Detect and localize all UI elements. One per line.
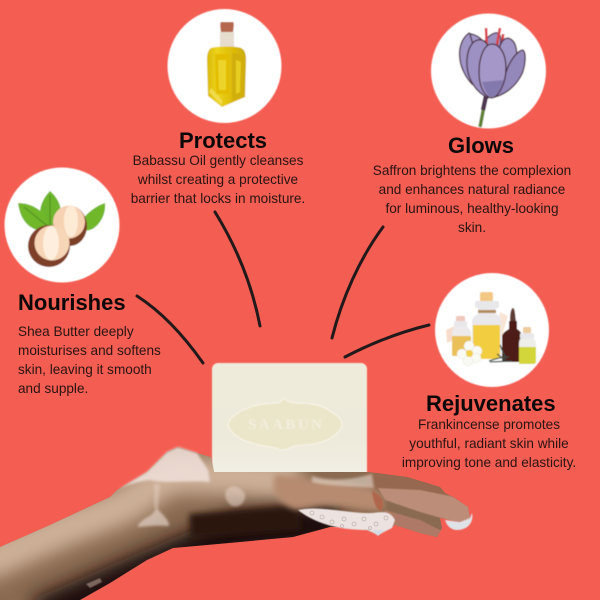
heading: protects: Protects: [179, 128, 267, 153]
heading: glows: Glows: [448, 133, 514, 158]
text: glows: skin.: [458, 220, 486, 235]
text: nourishes: Shea Butter deeply: [18, 324, 134, 338]
lower finger: [384, 510, 440, 537]
text: protects: barrier that locks in moisture.: [131, 190, 305, 206]
foam: wrist: [117, 447, 210, 490]
heading: rejuvenates: Rejuvenates: [426, 391, 556, 416]
soap bar: [212, 363, 367, 488]
foam: drip below palm: [372, 530, 384, 536]
text: protects: whilst creating a protective: [138, 172, 298, 186]
connector: glows: [332, 227, 383, 338]
foam: center patch: [225, 487, 245, 506]
text: nourishes: skin, leaving it smooth: [18, 362, 152, 376]
icon: essential oil bottles: [435, 273, 549, 387]
foam: [86, 447, 472, 588]
foam: fingertip drop: [445, 513, 472, 530]
text: nourishes: and supple.: [18, 380, 88, 396]
soap embossed logo: SAABUN: [248, 417, 322, 433]
text: rejuvenates: [402, 416, 576, 470]
connector: protects: [215, 212, 260, 326]
foam: arm speck: [86, 578, 102, 588]
text: glows: [373, 163, 571, 235]
soap embossed logo: [228, 398, 342, 450]
icon: saffron flower: [431, 14, 546, 128]
text: rejuvenates: Frankincense promotes: [418, 416, 560, 432]
heading: nourishes: Nourishes: [18, 290, 126, 315]
text: glows: and enhances natural radiance: [379, 182, 565, 197]
arm highlight: [0, 475, 300, 565]
palm shadow: [40, 524, 340, 600]
text: nourishes: moisturises and softens: [18, 342, 161, 358]
text: rejuvenates: youthful, radiant skin while: [409, 436, 569, 450]
connector: nourishes: [137, 296, 203, 363]
foam: side of hand: [138, 508, 169, 527]
text: glows: for luminous, healthy-looking: [385, 201, 559, 216]
text: rejuvenates: improving tone and elasticity.: [402, 454, 576, 470]
foam: along soap base: [312, 474, 374, 488]
thumb: [273, 474, 384, 510]
text: glows: Saffron brightens the complexion: [373, 163, 571, 178]
top finger: [366, 472, 445, 494]
connector: rejuvenates: [345, 325, 429, 357]
text: protects: [131, 152, 305, 206]
text: nourishes: [18, 324, 161, 396]
foam: under thumb: [298, 508, 395, 535]
text: protects: Babassu Oil gently cleanses: [133, 152, 303, 168]
foam: under-thumb bubbles: [310, 511, 388, 530]
hand: [0, 440, 480, 600]
palm core shadow: [190, 518, 300, 526]
middle finger: [378, 488, 472, 522]
icon: shea nuts and leaves: [4, 168, 120, 282]
icon: oil bottle: [168, 9, 282, 123]
